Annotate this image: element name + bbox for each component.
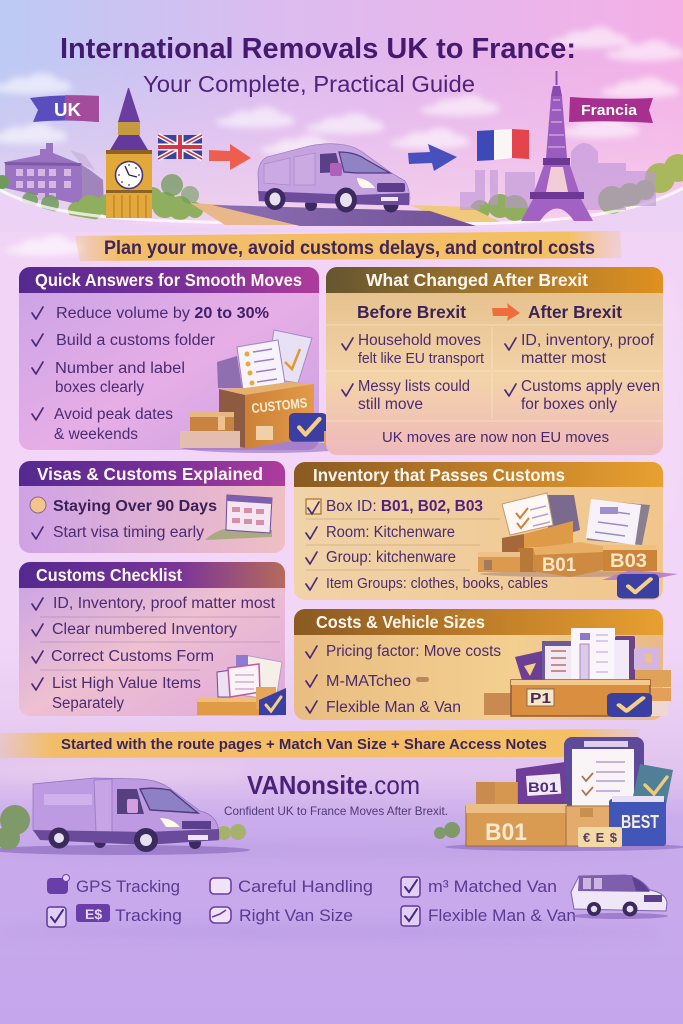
comparison rows: for boxes only: [521, 396, 617, 413]
inventory rows: [306, 498, 548, 592]
panel: customs checklist: Customs Checklist: [36, 565, 182, 585]
panel: quick answers: [19, 267, 351, 453]
illustration: documents and P1 box: [484, 628, 671, 717]
panel: visas and customs: [19, 461, 285, 553]
checklist items: Clear numbered Inventory: [52, 621, 237, 638]
brand: [224, 770, 448, 818]
feature: right van size: Right Van Size: [239, 907, 353, 925]
feature: cost tracking: Tracking: [115, 907, 182, 925]
comparison rows: still move: [358, 396, 423, 413]
France banner: [569, 97, 653, 123]
French flag: [477, 129, 529, 161]
feature: matched van: m³ Matched Van: [428, 878, 557, 896]
comparison rows: ID, inventory, proof: [521, 332, 655, 349]
inventory rows: Room: Kitchenware: [326, 524, 455, 541]
illustration: documents and P1 box: P1: [530, 690, 551, 707]
comparison rows: Household moves: [358, 332, 481, 349]
inventory rows: Item Groups: clothes, books, cables: [326, 576, 548, 592]
inventory rows: Box ID: B01, B02, B03: [326, 498, 483, 515]
tagline banner: Plan your move, avoid customs delays, and control costs: [104, 238, 595, 259]
panel: costs and vehicle sizes: [294, 609, 671, 720]
call to action banner: [0, 729, 640, 758]
inventory rows: Group: kitchenware: [326, 549, 456, 566]
illustration: boxes, clipboard, book: €E$: [583, 830, 618, 845]
bottom van scene: [0, 778, 460, 855]
panel: quick answers: Quick Answers for Smooth Moves: [35, 270, 302, 290]
comparison rows: matter most: [521, 350, 607, 367]
feature: cost tracking: E$: [85, 906, 102, 922]
feature: cost tracking: [47, 904, 182, 927]
feature list: [47, 874, 576, 927]
illustration: labelled boxes and papers: [478, 493, 678, 598]
checklist: boxes clearly: [55, 379, 144, 396]
icon: small van: [571, 875, 668, 919]
icon: documents in box: [197, 655, 286, 715]
van: [33, 778, 219, 852]
checklist items: Separately: [52, 695, 124, 712]
left buildings: [4, 143, 104, 208]
checklist: [32, 305, 269, 443]
checklist items: List High Value Items: [52, 675, 201, 692]
checklist items: ID, Inventory, proof matter most: [53, 595, 276, 612]
panel: visas and customs: Visas & Customs Explained: [37, 464, 263, 484]
checklist: Avoid peak dates: [54, 406, 173, 423]
panel: what changed after Brexit: What Changed After Brexit: [366, 270, 588, 290]
trees: [0, 154, 683, 221]
title: Your Complete, Practical Guide: [143, 71, 475, 97]
footnote: UK moves are now non EU moves: [382, 430, 609, 446]
panel: visas and customs: Start visa timing early: [53, 524, 204, 541]
UK flag: [158, 135, 202, 159]
comparison rows: Customs apply even: [521, 378, 660, 395]
comparison rows: Messy lists could: [358, 378, 470, 395]
illustration: boxes, clipboard, book: [445, 737, 683, 851]
right buildings: [460, 143, 656, 210]
panel: customs checklist: [19, 562, 286, 716]
illustration: labelled boxes and papers: B01: [542, 555, 576, 576]
ground shadow: [0, 845, 250, 855]
title: [60, 33, 576, 97]
cost rows: Pricing factor: Move costs: [326, 643, 501, 660]
arrow: red: [209, 144, 251, 170]
UK banner: UK: [54, 100, 81, 120]
tagline banner: [75, 231, 622, 261]
comparison rows: felt like EU transport: [358, 351, 484, 367]
checklist: Reduce volume by 20 to 30%: [56, 305, 269, 322]
feature: flexible man and van: Flexible Man & Van: [428, 907, 576, 925]
panel: inventory that passes customs: Inventory that Passes Customs: [313, 465, 565, 485]
feature: careful handling: Careful Handling: [238, 878, 373, 896]
hero scene: [0, 71, 683, 232]
before and after headings: Before Brexit: [357, 302, 466, 322]
panel: visas and customs: Staying Over 90 Days: [53, 498, 217, 515]
Eiffel tower: [521, 71, 593, 221]
illustration: boxes, clipboard, book: BEST: [621, 812, 659, 832]
before and after headings: After Brexit: [528, 302, 622, 322]
checklist: Number and label: [55, 360, 185, 377]
road: [190, 203, 340, 225]
call to action banner: Started with the route pages + Match Van Size + Share Access Notes: [61, 736, 547, 753]
checklist: Build a customs folder: [56, 332, 215, 349]
feature: GPS tracking: [47, 874, 180, 896]
panel: inventory that passes customs: [294, 462, 678, 600]
comparison rows: [342, 332, 660, 413]
France banner: Francia: [581, 102, 638, 119]
icon: customs box with documents: [180, 330, 351, 453]
feature: GPS tracking: GPS Tracking: [76, 878, 180, 896]
Big Ben: [106, 88, 152, 218]
UK banner: [30, 95, 99, 122]
brand: VANonsite.com: [247, 770, 420, 800]
arrow: blue: [408, 144, 457, 171]
icon: customs box with documents: CUSTOMS: [251, 395, 308, 416]
icon: calendar: [205, 495, 272, 540]
illustration: boxes, clipboard, book: B01: [528, 779, 558, 795]
feature: matched van: [401, 877, 557, 897]
panel: costs and vehicle sizes: Costs & Vehicle Sizes: [316, 612, 485, 632]
cost rows: M-MATcheo: [326, 673, 411, 690]
panel: what changed after Brexit: [326, 267, 663, 455]
cost rows: [306, 643, 501, 716]
trees: [0, 805, 460, 850]
foreground curve: [0, 188, 683, 232]
checklist: & weekends: [54, 426, 138, 443]
van: [258, 144, 410, 212]
cost rows: Flexible Man & Van: [326, 699, 461, 716]
before and after headings: [357, 302, 622, 322]
brand: Confident UK to France Moves After Brexit.: [224, 804, 448, 818]
checklist items: Correct Customs Form: [51, 648, 214, 665]
title: International Removals UK to France:: [60, 33, 576, 65]
illustration: labelled boxes and papers: B03: [610, 551, 647, 572]
checklist items: [32, 595, 280, 712]
illustration: boxes, clipboard, book: B01: [485, 819, 527, 846]
